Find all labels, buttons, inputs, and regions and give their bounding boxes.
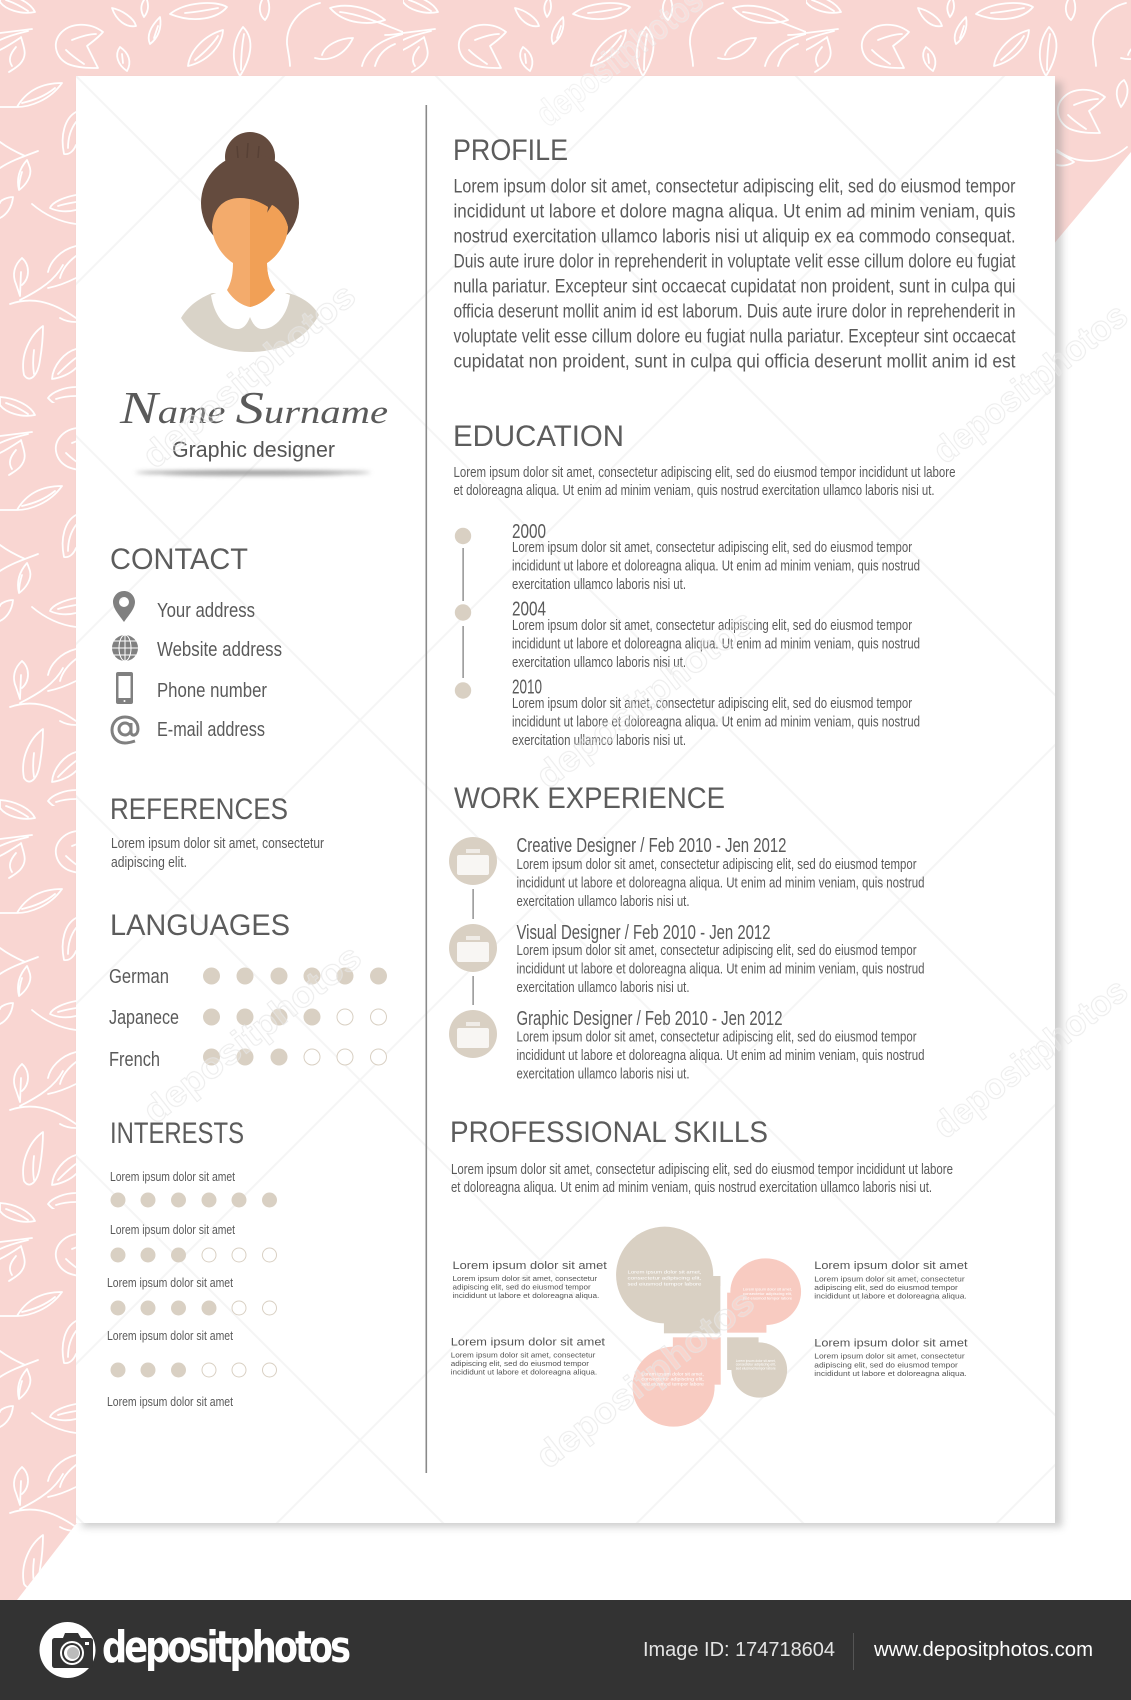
work entry: graphic designer: exercitation ullamco laboris nisi ut.: [516, 1066, 690, 1082]
language rating: Japanece: [203, 1008, 386, 1026]
petal: bottom right: sed eiusmod tempor labore: [736, 1366, 776, 1370]
name underline shadow: [135, 471, 371, 476]
skills petal diagram: [451, 1227, 967, 1427]
contact: email: E-mail address: [157, 718, 265, 741]
petal: bottom left: consectetur adipiscing elit,: [641, 1377, 704, 1382]
petal: bottom left: sed eiusmod tempor labore: [641, 1382, 705, 1387]
petal: top right: [727, 1258, 801, 1333]
petal: top right: sed eiusmod tempor labore: [743, 1296, 792, 1300]
profile paragraph: nulla pariatur. Excepteur sint occaecat cupidatat non proident, sunt in culpa qui: [454, 276, 1016, 298]
heading: work experience: WORK EXPERIENCE: [454, 782, 725, 815]
skill text: bottom right: adipiscing elit, sed do eiusmod tempor: [814, 1361, 958, 1369]
petal: top left: sed eiusmod tempor labore: [627, 1281, 702, 1286]
skill text: bottom left: incididunt ut labore et doloreagna aliqua.: [451, 1368, 597, 1376]
language labels: [109, 965, 179, 1071]
petal: bottom left: Lorem ipsum dolor sit amet,: [641, 1372, 704, 1377]
profile paragraph: nostrud exercitation ullamco laboris nisi ut aliquip ex ea commodo consequat.: [454, 226, 1016, 248]
contact: website: Website address: [157, 638, 282, 661]
education entry 2004: exercitation ullamco laboris nisi ut.: [512, 654, 686, 671]
work entry: creative designer: [516, 834, 924, 910]
education entry 2004: incididunt ut labore et doloreagna aliqua. Ut enim ad minim veniam, quis nostrud: [512, 636, 920, 652]
skill text: top left: [452, 1260, 607, 1300]
watermarks: depositphotos: [134, 274, 363, 476]
education intro: et doloreagna aliqua. Ut enim ad minim veniam, quis nostrud exercitation ullamco laboris nisi ut.: [454, 482, 934, 499]
education entry 2010: [512, 676, 920, 749]
watermarks: depositphotos: [135, 936, 369, 1131]
work entry: graphic designer: Graphic Designer / Feb 2010 - Jen 2012: [516, 1007, 782, 1030]
education entry 2000: [512, 521, 920, 593]
watermarks: depositphotos: [528, 601, 762, 796]
interest rating: row 4: [110, 1362, 276, 1378]
icon: briefcase 2: [449, 924, 497, 972]
petal: top left: [616, 1227, 720, 1333]
heading: languages: LANGUAGES: [110, 909, 290, 942]
work entry: creative designer: exercitation ullamco laboris nisi ut.: [516, 893, 690, 910]
name: Name Surname: [119, 382, 388, 433]
interest labels: [107, 1169, 235, 1409]
education entry 2004: Lorem ipsum dolor sit amet, consectetur adipiscing elit, sed do eiusmod tempor: [512, 617, 912, 634]
petal: bottom left: [632, 1337, 721, 1427]
skills intro: et doloreagna aliqua. Ut enim ad minim veniam, quis nostrud exercitation ullamco laboris nisi ut.: [451, 1179, 932, 1196]
petal: bottom right: consectetur adipiscing elit,: [736, 1363, 776, 1367]
work entry: creative designer: Lorem ipsum dolor sit amet, consectetur adipiscing elit, sed do eiusmod tempor: [516, 856, 916, 873]
petal: top left: consectetur adipiscing elit,: [627, 1275, 701, 1280]
interest labels: Lorem ipsum dolor sit amet: [107, 1328, 233, 1343]
interest rating: row 2: [110, 1248, 276, 1262]
education entry 2010: exercitation ullamco laboris nisi ut.: [512, 732, 686, 749]
icon: at sign: [112, 717, 138, 743]
card shadow: [82, 82, 1062, 1527]
heading: education: EDUCATION: [453, 420, 624, 453]
references text: adipiscing elit.: [111, 855, 187, 871]
work entry: visual designer: exercitation ullamco laboris nisi ut.: [516, 979, 690, 996]
skill text: bottom left: adipiscing elit, sed do eiusmod tempor: [451, 1359, 589, 1368]
education entry 2000: 2000: [512, 521, 546, 543]
education intro: [454, 464, 956, 499]
icon: briefcase 3: [449, 1010, 497, 1058]
skill text: top left: adipiscing elit, sed do eiusmod tempor: [452, 1283, 591, 1292]
work entry: graphic designer: Lorem ipsum dolor sit amet, consectetur adipiscing elit, sed do eiusmod tempor: [516, 1028, 916, 1046]
footer bar: [0, 1600, 1131, 1700]
profile paragraph: voluptate velit esse cillum dolore eu fugiat nulla pariatur. Excepteur sint occaecat: [454, 326, 1016, 348]
footer logo icon: [40, 1622, 96, 1678]
education entry 2000: Lorem ipsum dolor sit amet, consectetur adipiscing elit, sed do eiusmod tempor: [512, 539, 912, 556]
profile paragraph: [454, 176, 1016, 372]
footer separator: [853, 1633, 854, 1670]
skills intro: [451, 1161, 953, 1196]
contact: address: Your address: [157, 599, 255, 622]
icon: briefcase 1: [449, 837, 497, 885]
avatar illustration: [181, 132, 319, 352]
work entry: creative designer: incididunt ut labore et doloreagna aliqua. Ut enim ad minim veniam, quis nostrud: [516, 874, 924, 892]
skill text: bottom right: Lorem ipsum dolor sit amet: [814, 1338, 967, 1350]
language labels: German: [109, 965, 169, 988]
work entry: visual designer: Lorem ipsum dolor sit amet, consectetur adipiscing elit, sed do eiusmod tempor: [516, 942, 916, 959]
watermarks: [134, 0, 1131, 1476]
education entry 2010: 2010: [512, 676, 542, 698]
skill text: bottom left: [451, 1337, 605, 1376]
heading: references: REFERENCES: [110, 793, 288, 826]
heading: professional skills: PROFESSIONAL SKILLS: [450, 1116, 768, 1149]
column divider: [426, 105, 427, 1473]
petal: top right: consectetur adipiscing elit,: [743, 1292, 792, 1296]
skill text: bottom right: [814, 1338, 967, 1378]
petal: top left: Lorem ipsum dolor sit amet,: [627, 1269, 701, 1274]
icon: location pin: [113, 591, 135, 622]
skill text: top right: Lorem ipsum dolor sit amet: [814, 1260, 967, 1272]
interest rating: row 1: [110, 1192, 277, 1208]
skill text: bottom right: incididunt ut labore et doloreagna aliqua.: [814, 1369, 967, 1378]
skill text: bottom left: Lorem ipsum dolor sit amet: [451, 1337, 605, 1349]
education entry 2010: incididunt ut labore et doloreagna aliqua. Ut enim ad minim veniam, quis nostrud: [512, 714, 920, 730]
skill text: top right: incididunt ut labore et doloreagna aliqua.: [814, 1292, 967, 1301]
skill text: top right: [814, 1260, 967, 1301]
profile paragraph: cupidatat non proident, sunt in culpa qui officia deserunt mollit anim id est: [454, 350, 1016, 372]
interest rating: row 3: [110, 1300, 276, 1316]
interest labels: Lorem ipsum dolor sit amet: [110, 1169, 235, 1184]
heading: interests: INTERESTS: [110, 1117, 244, 1150]
contact: phone: Phone number: [157, 679, 267, 702]
footer image id: Image ID: 174718604: [643, 1639, 835, 1661]
interest labels: Lorem ipsum dolor sit amet: [110, 1222, 235, 1237]
references text: [111, 836, 324, 871]
petal: bottom right: [727, 1337, 787, 1398]
education entry 2004: [512, 598, 920, 671]
footer website: www.depositphotos.com: [873, 1639, 1093, 1661]
profile paragraph: Lorem ipsum dolor sit amet, consectetur adipiscing elit, sed do eiusmod tempor: [454, 176, 1016, 198]
skill text: top left: Lorem ipsum dolor sit amet: [452, 1260, 607, 1272]
education entry 2000: incididunt ut labore et doloreagna aliqua. Ut enim ad minim veniam, quis nostrud: [512, 558, 920, 574]
education entry 2010: Lorem ipsum dolor sit amet, consectetur adipiscing elit, sed do eiusmod tempor: [512, 695, 912, 712]
work entry: graphic designer: [516, 1007, 924, 1082]
work timeline connectors: [472, 889, 474, 1005]
work entry: creative designer: Creative Designer / Feb 2010 - Jen 2012: [516, 834, 786, 857]
language labels: French: [109, 1048, 160, 1071]
interest labels: Lorem ipsum dolor sit amet: [107, 1275, 233, 1290]
icon: globe: [112, 635, 138, 661]
language rating: German: [203, 968, 387, 984]
petal: top right: Lorem ipsum dolor sit amet,: [743, 1288, 792, 1292]
petal: bottom right: Lorem ipsum dolor sit amet,: [736, 1359, 776, 1363]
references text: Lorem ipsum dolor sit amet, consectetur: [111, 836, 324, 852]
work entry: visual designer: incididunt ut labore et doloreagna aliqua. Ut enim ad minim veniam, quis nostrud: [516, 960, 924, 978]
icon: phone: [116, 672, 133, 704]
interest labels: Lorem ipsum dolor sit amet: [107, 1394, 233, 1409]
skill text: bottom right: Lorem ipsum dolor sit amet, consectetur: [814, 1352, 965, 1361]
skill text: top right: Lorem ipsum dolor sit amet, consectetur: [814, 1275, 965, 1283]
language rating: French: [203, 1048, 386, 1066]
language labels: Japanece: [109, 1006, 179, 1029]
education timeline markers: [455, 528, 471, 699]
work entry: graphic designer: incididunt ut labore et doloreagna aliqua. Ut enim ad minim veniam, quis nostrud: [516, 1047, 924, 1064]
footer logo wordmark: depositphotos: [102, 1622, 350, 1673]
education entry 2004: 2004: [512, 598, 546, 620]
skill text: top right: adipiscing elit, sed do eiusmod tempor: [814, 1283, 958, 1292]
watermarks: depositphotos: [528, 1281, 762, 1476]
heading: contact: CONTACT: [110, 543, 248, 576]
work entry: visual designer: [516, 921, 924, 996]
heading: profile: PROFILE: [453, 134, 568, 167]
profile paragraph: incididunt ut labore et dolore magna aliqua. Ut enim ad minim veniam, quis: [454, 200, 1016, 222]
education entry 2000: exercitation ullamco laboris nisi ut.: [512, 576, 686, 593]
card watermark grid: [76, 76, 1055, 1523]
skills intro: Lorem ipsum dolor sit amet, consectetur adipiscing elit, sed do eiusmod tempor incididunt ut labore: [451, 1161, 953, 1178]
education intro: Lorem ipsum dolor sit amet, consectetur adipiscing elit, sed do eiusmod tempor incididunt ut labore: [454, 464, 956, 481]
skill text: top left: Lorem ipsum dolor sit amet, consectetur: [452, 1274, 598, 1283]
skill text: bottom left: Lorem ipsum dolor sit amet, consectetur: [451, 1351, 596, 1359]
job title: Graphic designer: [172, 437, 335, 462]
work entry: visual designer: Visual Designer / Feb 2010 - Jen 2012: [516, 921, 770, 944]
panel: white resume card: [76, 76, 1055, 1523]
skill text: top left: incididunt ut labore et doloreagna aliqua.: [452, 1291, 599, 1300]
